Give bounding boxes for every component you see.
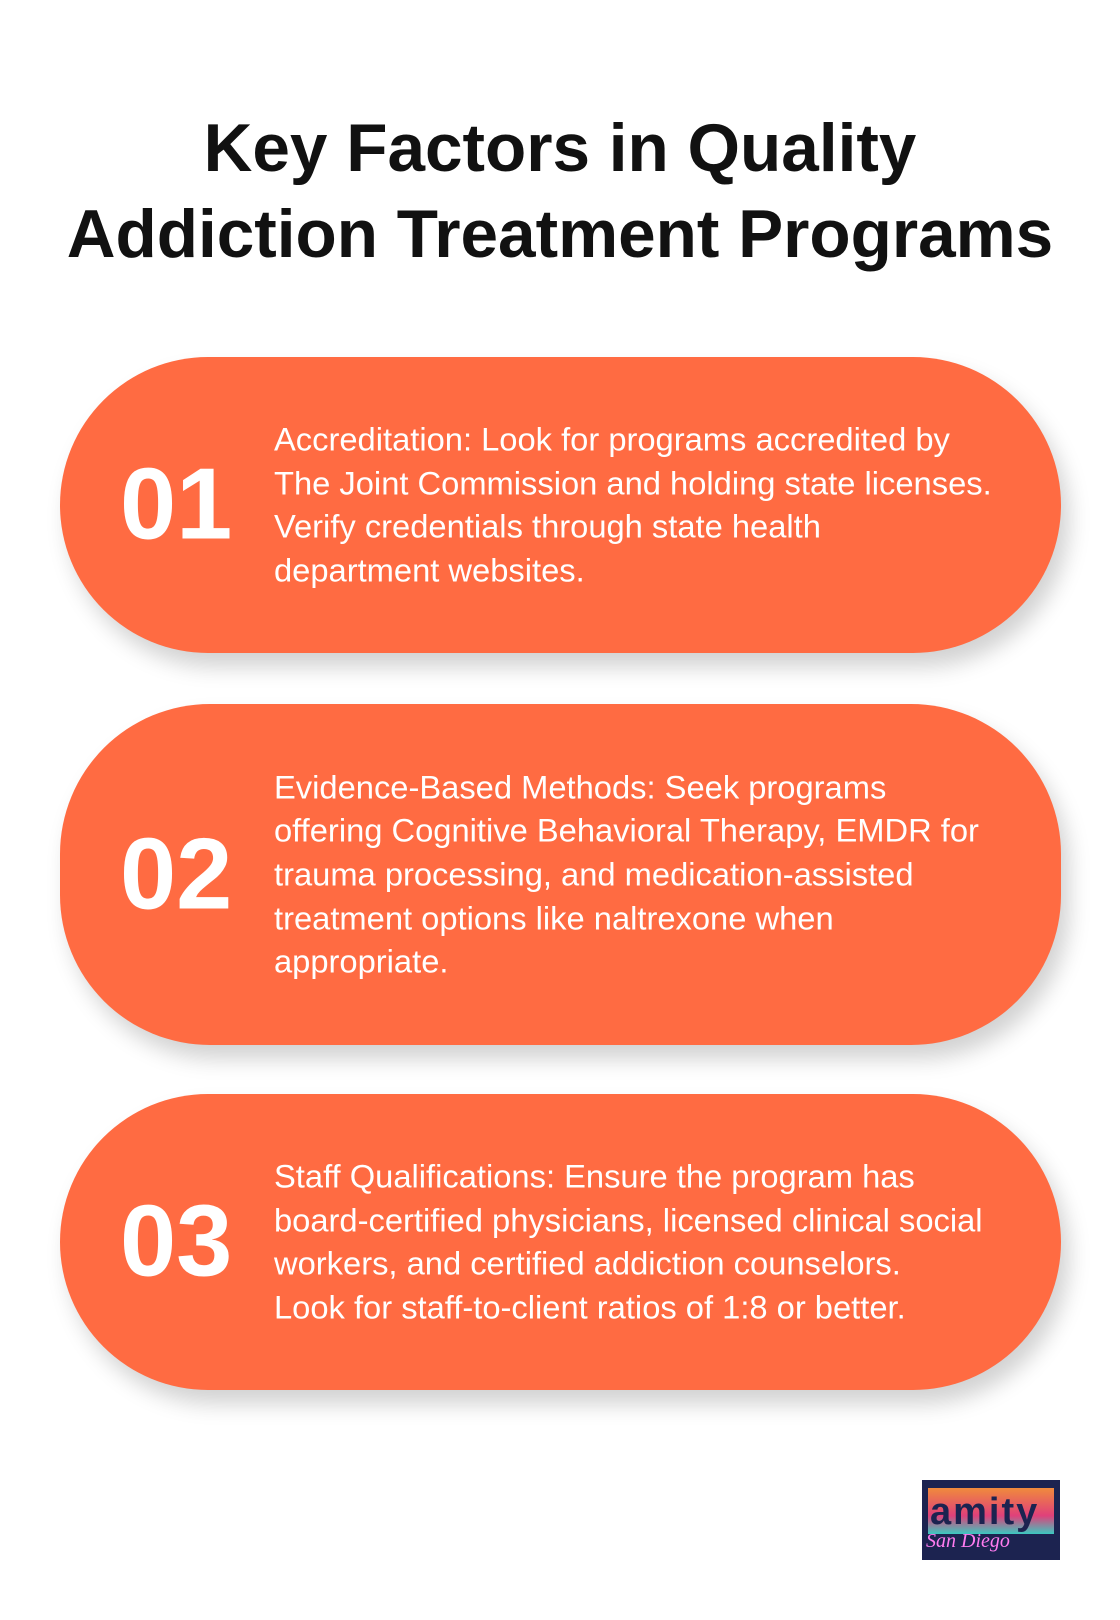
text: methods: treatment options like naltrexone when xyxy=(274,899,834,936)
text: methods xyxy=(274,768,979,980)
text: staff xyxy=(274,1158,983,1326)
title: Key Factors in Quality xyxy=(204,111,916,186)
number 02: 02 xyxy=(120,818,232,930)
logo xyxy=(922,1480,1060,1560)
text: staff: workers, and certified addiction counselors. xyxy=(274,1245,901,1282)
panel: accreditation xyxy=(60,357,1061,653)
text: accreditation xyxy=(274,421,992,589)
logo: amity xyxy=(930,1491,1039,1533)
number 01: 01 xyxy=(120,448,232,560)
text: accreditation: Accreditation: Look for programs accredited by xyxy=(274,421,950,458)
text: staff: board-certified physicians, licensed clinical social xyxy=(274,1201,983,1238)
title: Addiction Treatment Programs xyxy=(67,197,1053,272)
title xyxy=(67,111,1053,272)
number 03: 03 xyxy=(120,1186,232,1298)
text: staff: Look for staff-to-client ratios of 1:8 or better. xyxy=(274,1289,906,1326)
panel: evidence-based methods xyxy=(60,704,1061,1045)
text: accreditation: Verify credentials through state health xyxy=(274,508,821,545)
text: methods: trauma processing, and medication-assisted xyxy=(274,856,914,893)
text: methods: appropriate. xyxy=(274,943,448,980)
text: methods: Evidence-Based Methods: Seek programs xyxy=(274,768,886,805)
text: methods: offering Cognitive Behavioral Therapy, EMDR for xyxy=(274,812,979,849)
text: accreditation: department websites. xyxy=(274,552,585,589)
logo: San Diego xyxy=(926,1530,1010,1552)
text: staff: Staff Qualifications: Ensure the program has xyxy=(274,1158,915,1195)
panel: staff qualifications xyxy=(60,1094,1061,1390)
text: accreditation: The Joint Commission and holding state licenses. xyxy=(274,464,992,501)
